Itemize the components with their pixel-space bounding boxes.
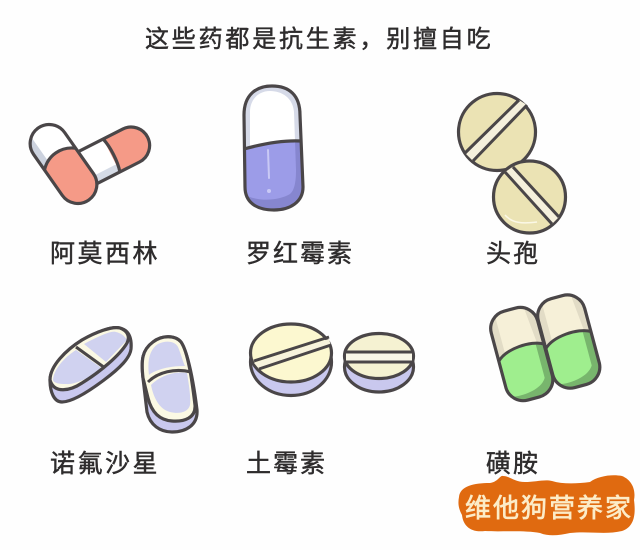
icon: amoxicillin capsules <box>23 117 156 211</box>
label: roxithromycin: 罗红霉素 <box>246 240 354 268</box>
capsule: horizontal red and white <box>59 121 156 195</box>
tablet: lower round <box>494 161 566 233</box>
label: oxytetracycline: 土霉素 <box>246 450 327 478</box>
icon: sulfonamide capsules <box>487 291 604 405</box>
tablet: upright right oval <box>142 337 197 432</box>
tablet: small round <box>344 334 414 392</box>
label: sulfonamide: 磺胺 <box>486 450 540 478</box>
tablet: large round <box>250 324 332 396</box>
icon: oxytetracycline tablets <box>250 324 414 396</box>
tablet: upper round <box>458 94 536 170</box>
capsule: tilted red and white <box>23 117 104 211</box>
icon: norfloxacin tablets <box>50 328 197 432</box>
badge: brand watermark <box>458 475 635 535</box>
label: amoxicillin: 阿莫西林 <box>50 240 160 268</box>
badge text: 维他狗营养家 <box>465 493 633 523</box>
icon: cephalosporin tablets <box>458 94 566 233</box>
label: norfloxacin: 诺氟沙星 <box>50 450 160 478</box>
label: cephalosporin: 头孢 <box>486 240 540 268</box>
icon: roxithromycin capsule <box>244 86 303 210</box>
capsule: right green <box>534 291 604 392</box>
capsule: left green <box>487 303 557 405</box>
title: 这些药都是抗生素，别擅自吃 <box>145 26 493 53</box>
tablet: tilted left oval <box>50 328 131 402</box>
